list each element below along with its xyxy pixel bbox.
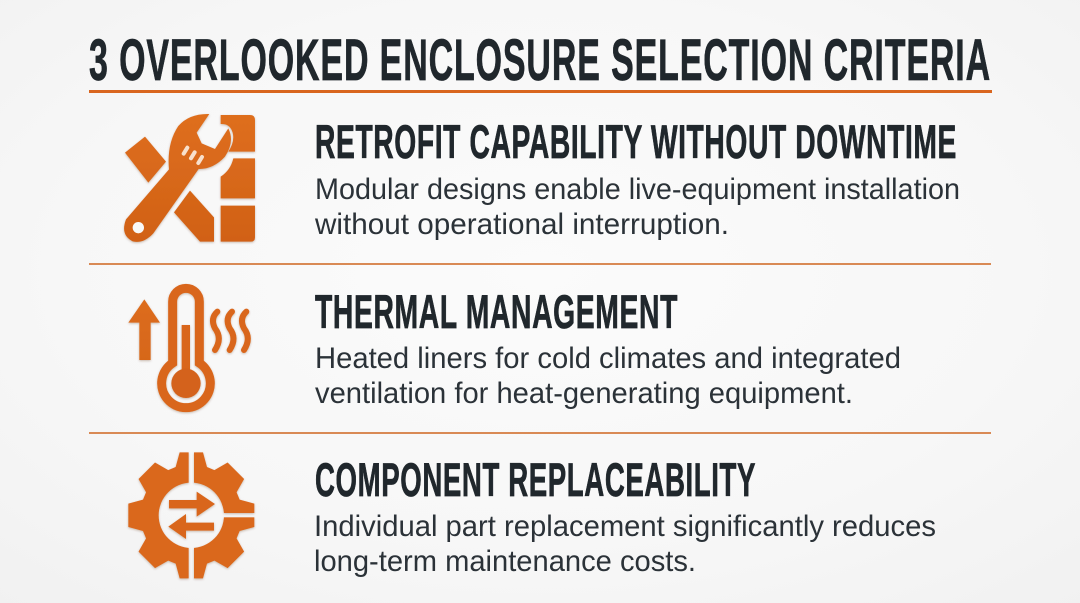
icon: thermometer with heat xyxy=(128,288,248,408)
text: component description: long-term maintenance costs. xyxy=(314,545,696,578)
heading: thermal management: THERMAL MANAGEMENT xyxy=(315,285,678,338)
text: component description xyxy=(314,510,936,578)
text: thermal description: ventilation for heat-generating equipment. xyxy=(315,377,853,410)
text: component description: Individual part replacement significantly reduces xyxy=(314,510,936,543)
text: retrofit description: Modular designs enable live-equipment installation xyxy=(315,173,960,206)
title underline xyxy=(89,90,992,93)
text: retrofit description xyxy=(314,173,960,241)
text: retrofit description: without operational interruption. xyxy=(314,208,729,241)
text: thermal description xyxy=(315,342,901,410)
icon: wrench and bricks xyxy=(124,114,255,242)
heading: component replaceability: COMPONENT REPLACEABILITY xyxy=(315,453,756,506)
icon: gear with arrows xyxy=(128,452,254,578)
text: thermal description: Heated liners for cold climates and integrated xyxy=(315,342,901,375)
